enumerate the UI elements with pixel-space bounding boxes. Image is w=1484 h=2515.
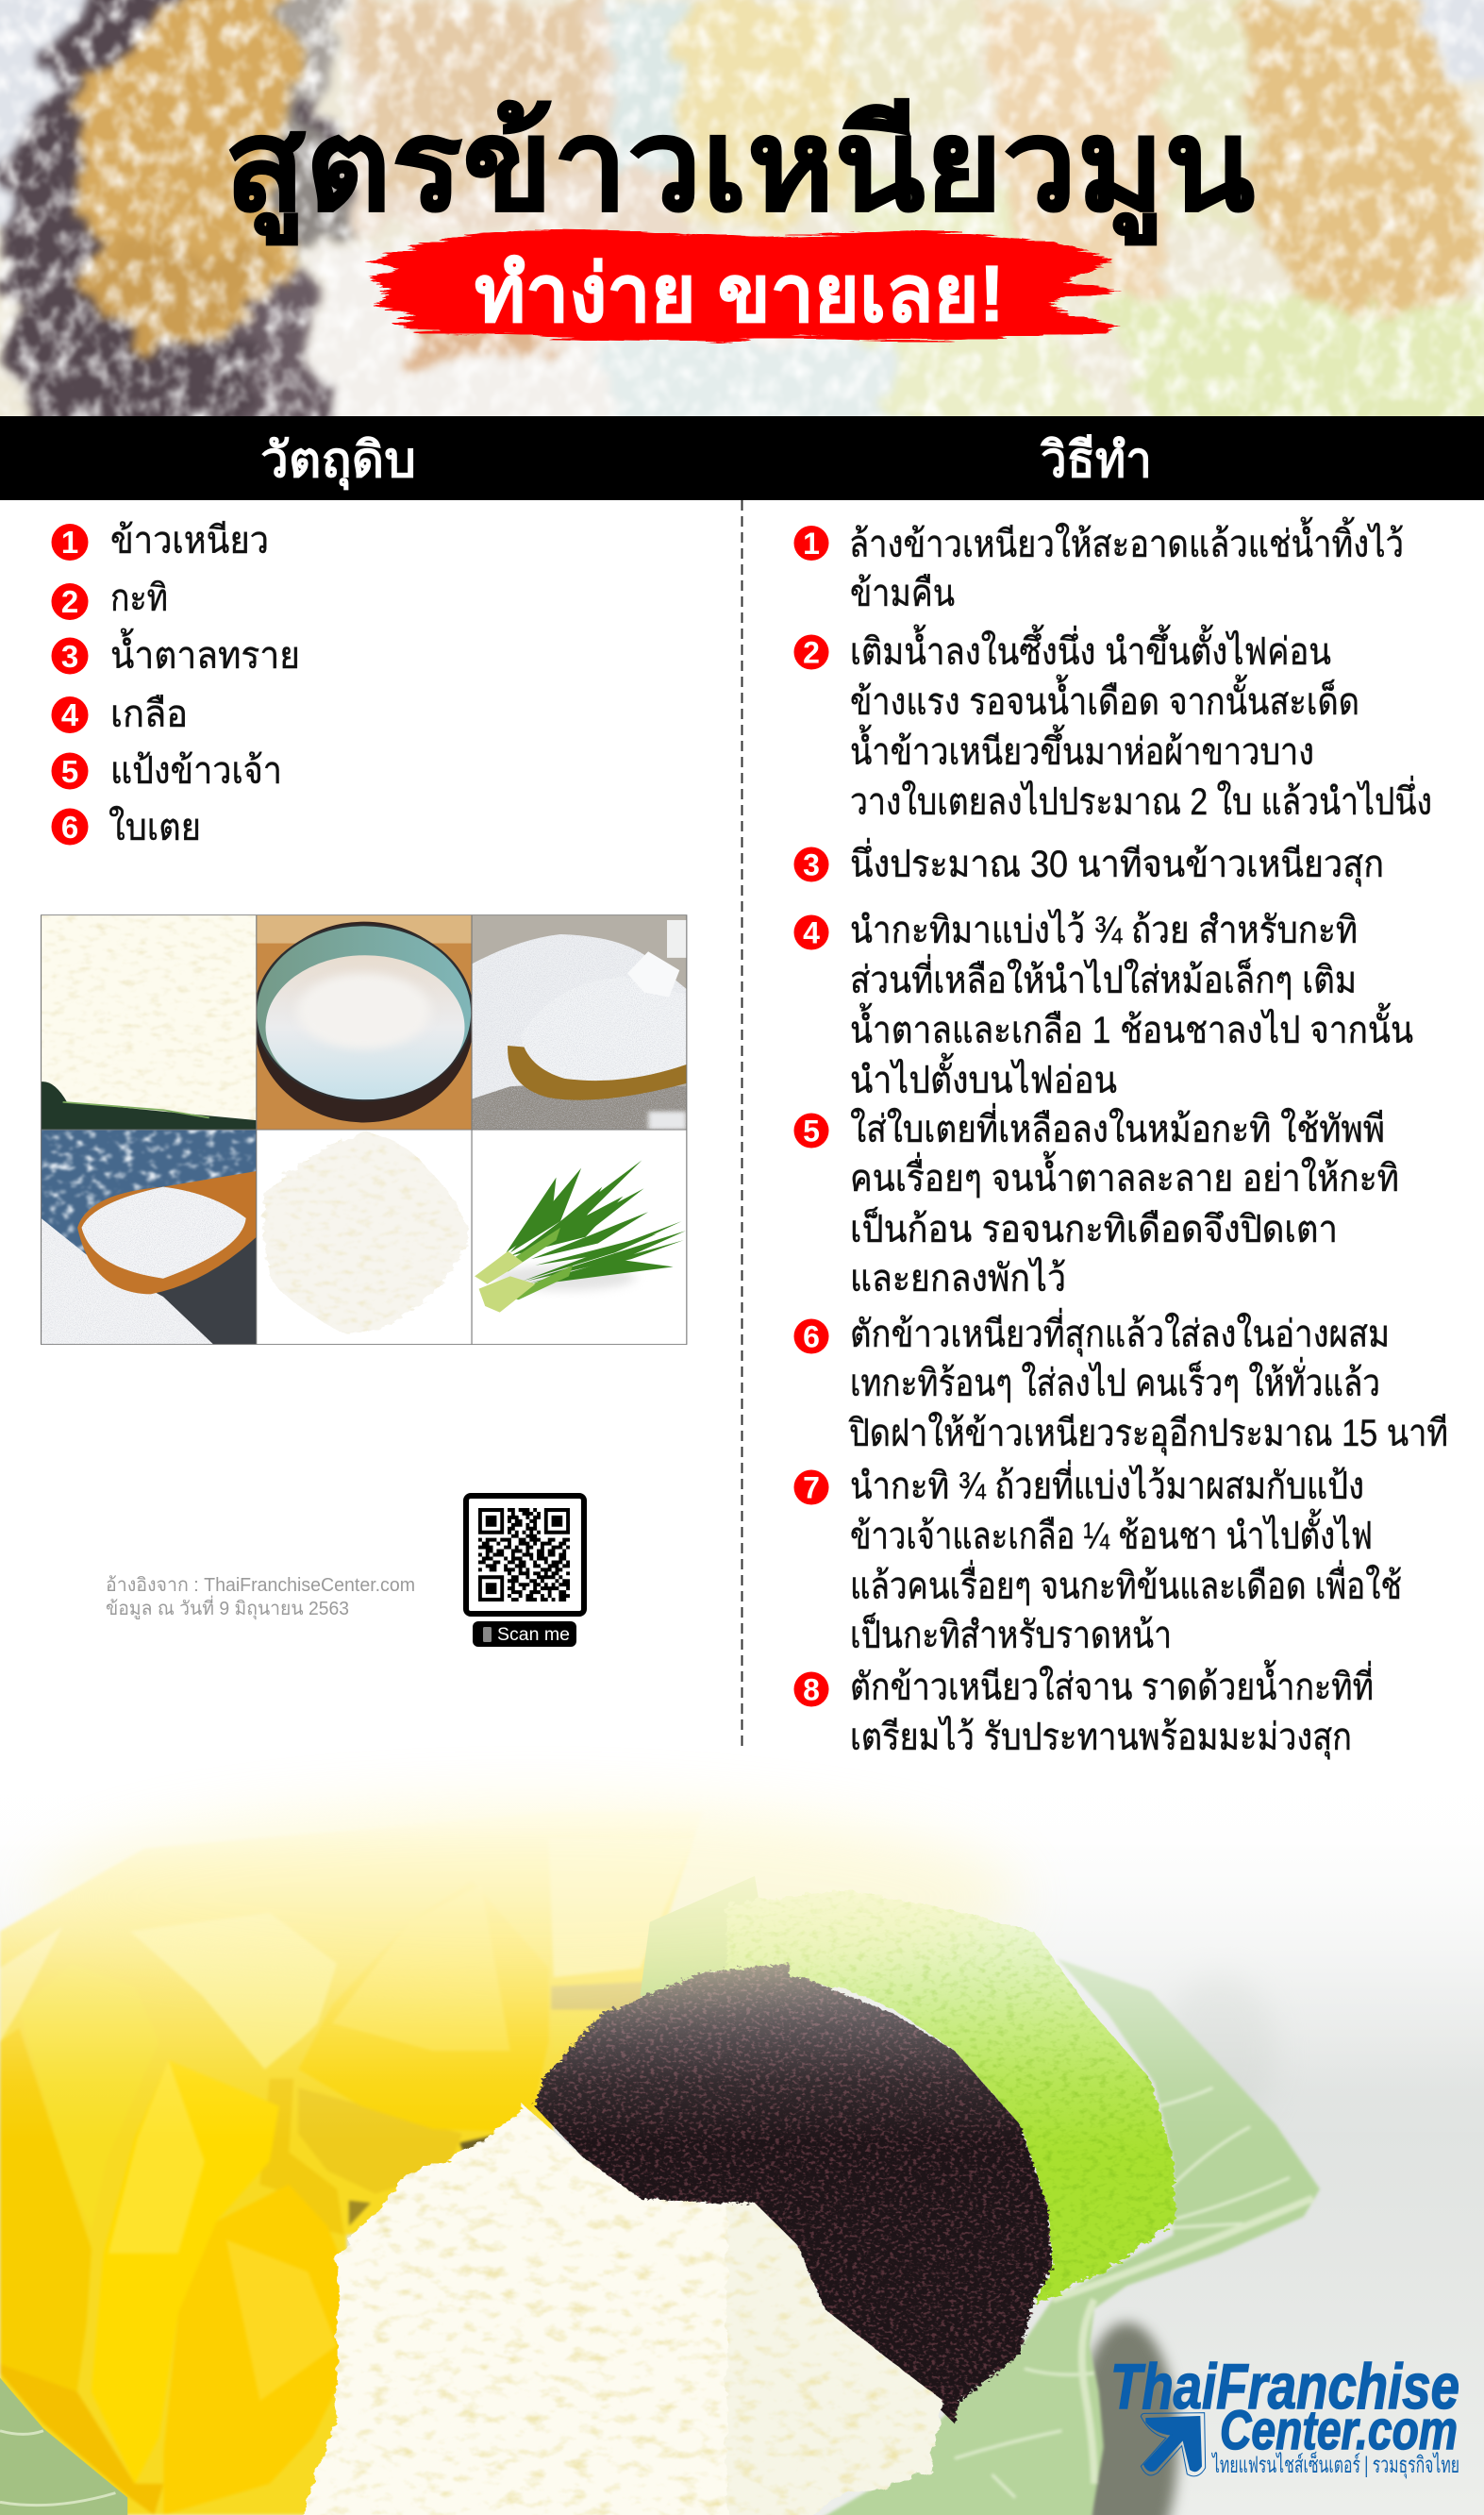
ingredient 6	[51, 805, 201, 848]
heading: ingredients: วัตถุดิบ	[260, 433, 416, 491]
title: สูตรข้าวเหนียวมูน	[225, 93, 1255, 245]
step 7: ข้าวเจ้าและเกลือ ¼ ช้อนชา นำไปตั้งไฟ	[850, 1508, 1373, 1557]
step 5: ใส่ใบเตยที่เหลือลงในหม้อกะทิ ใช้ทัพพี	[850, 1103, 1385, 1150]
step 7	[794, 1460, 1402, 1656]
step 7: 7	[803, 1470, 820, 1504]
step 8: ตักข้าวเหนียวใส่จาน ราดด้วยน้ำกะทิที่	[850, 1659, 1374, 1708]
step 1: 1	[803, 527, 820, 561]
subtitle: red brush banner	[367, 229, 1122, 342]
small plate at bottom left	[0, 2378, 127, 2515]
step 6: 6	[803, 1319, 820, 1353]
source note	[106, 1575, 415, 1620]
ingredient 5	[51, 750, 282, 792]
black sticky rice	[726, 1977, 1053, 2423]
ingredient 1: 1	[61, 525, 78, 560]
ingredient 6: ใบเตย	[108, 805, 201, 848]
step 4: นำไปตั้งบนไฟอ่อน	[850, 1052, 1117, 1101]
left half of photo: mango and white rice	[0, 1812, 770, 2515]
step 4: 4	[803, 915, 820, 949]
leaf plate	[801, 1959, 1320, 2515]
ingredient 2	[51, 578, 168, 620]
source note: อ้างอิงจาก : ThaiFranchiseCenter.com	[106, 1575, 415, 1596]
photo: coconut milk	[255, 915, 474, 1130]
ingredient 6: 6	[61, 810, 78, 845]
step 4: นำกะทิมาแบ่งไว้ ¾ ถ้วย สำหรับกะทิ	[850, 909, 1358, 951]
ingredient 2: กะทิ	[110, 578, 168, 619]
bottom photo: mango sticky rice	[0, 1746, 1484, 2515]
step 7: เป็นกะทิสำหรับราดหน้า	[850, 1612, 1172, 1656]
step 6: เทกะทิร้อนๆ ใส่ลงไป คนเร็วๆ ให้ทั่วแล้ว	[850, 1357, 1380, 1404]
step 2: ข้างแรง รอจนน้ำเดือด จากนั้นสะเด็ด	[850, 674, 1359, 723]
step 5: 5	[803, 1114, 820, 1148]
step 5: และยกลงพักไว้	[850, 1257, 1066, 1299]
step 5: เป็นก้อน รอจนกะทิเดือดจึงปิดเตา	[850, 1206, 1338, 1250]
step 1	[794, 516, 1404, 614]
photo: pandan leaves	[475, 1161, 686, 1313]
scan me label: Scan me	[497, 1625, 570, 1645]
ingredient 1	[51, 520, 269, 562]
black header bar	[0, 416, 1484, 500]
panel: ingredient list	[51, 520, 300, 848]
photo: sticky rice	[42, 915, 257, 1130]
shadow under plate	[1075, 2322, 1178, 2515]
black sticky rice left part	[534, 1964, 790, 2203]
dashed divider	[742, 500, 743, 1751]
photo: sugar	[472, 915, 687, 1130]
step 8: 8	[803, 1672, 820, 1706]
background photo: blended sticky rice	[0, 0, 1484, 455]
step 2	[794, 624, 1432, 823]
ingredient 3	[51, 628, 300, 677]
ingredient 3: 3	[61, 639, 78, 674]
ingredient 1: ข้าวเหนียว	[110, 520, 269, 562]
grid lines	[42, 915, 687, 1345]
source note: ข้อมูล ณ วันที่ 9 มิถุนายน 2563	[106, 1595, 349, 1620]
scan me label	[473, 1621, 576, 1647]
QR code	[466, 1496, 584, 1614]
ingredient 5: 5	[61, 754, 78, 789]
heading: method: วิธีทำ	[1040, 433, 1152, 488]
icon: logo arrow	[1141, 2413, 1206, 2476]
panel: method steps	[794, 516, 1448, 1760]
step 6: ตักข้าวเหนียวที่สุกแล้วใส่ลงในอ่างผสม	[850, 1308, 1390, 1357]
step 7: นำกะทิ ¾ ถ้วยที่แบ่งไว้มาผสมกับแป้ง	[850, 1460, 1364, 1507]
step 4	[794, 909, 1413, 1101]
white sticky rice lower edge	[726, 2193, 943, 2515]
ingredient 4	[51, 694, 188, 735]
subtitle: red brush banner: ทำง่าย ขายเลย!	[475, 249, 1005, 338]
ingredient 2: 2	[61, 584, 78, 619]
photo: salt	[42, 1130, 257, 1345]
step 8: เตรียมไว้ รับประทานพร้อมมะม่วงสุก	[850, 1716, 1352, 1760]
ingredient photo grid	[29, 908, 687, 1345]
top white fade	[0, 1746, 1484, 2142]
step 6	[794, 1308, 1448, 1456]
white sticky rice	[298, 2106, 770, 2515]
ingredient 4: 4	[61, 697, 79, 732]
photo: rice flour	[257, 1130, 472, 1345]
green sticky rice	[726, 1889, 1176, 2305]
step 2: น้ำข้าวเหนียวขึ้นมาห่อผ้าขาวบาง	[850, 724, 1314, 773]
pale green rice corner	[640, 1876, 759, 1997]
ingredient 3: น้ำตาลทราย	[110, 628, 300, 677]
step 1: ข้ามคืน	[850, 573, 955, 614]
step 3: 3	[803, 847, 820, 881]
step 3: นึ่งประมาณ 30 นาทีจนข้าวเหนียวสุก	[850, 838, 1384, 887]
step 2: 2	[803, 636, 820, 670]
mango slices	[0, 1812, 703, 2515]
step 5	[794, 1103, 1399, 1299]
step 1: ล้างข้าวเหนียวให้สะอาดแล้วแช่น้ำทิ้งไว้	[849, 516, 1404, 565]
step 2: เติมน้ำลงในซึ้งนึ่ง นำขึ้นตั้งไฟค่อน	[850, 624, 1331, 673]
step 5: คนเรื่อยๆ จนน้ำตาลละลาย อย่าให้กะทิ	[850, 1150, 1399, 1199]
step 4: ส่วนที่เหลือให้นำไปใส่หม้อเล็กๆ เติม	[850, 954, 1357, 1001]
step 8	[794, 1659, 1374, 1760]
ingredient 5: แป้งข้าวเจ้า	[110, 750, 282, 792]
logo: ThaiFranchise Center.com	[1110, 2351, 1459, 2479]
right half of photo: plate, green and black rice	[726, 1889, 1320, 2515]
ingredient 4: เกลือ	[110, 694, 188, 735]
step 4: น้ำตาลและเกลือ 1 ช้อนชาลงไป จากนั้น	[850, 1002, 1413, 1051]
